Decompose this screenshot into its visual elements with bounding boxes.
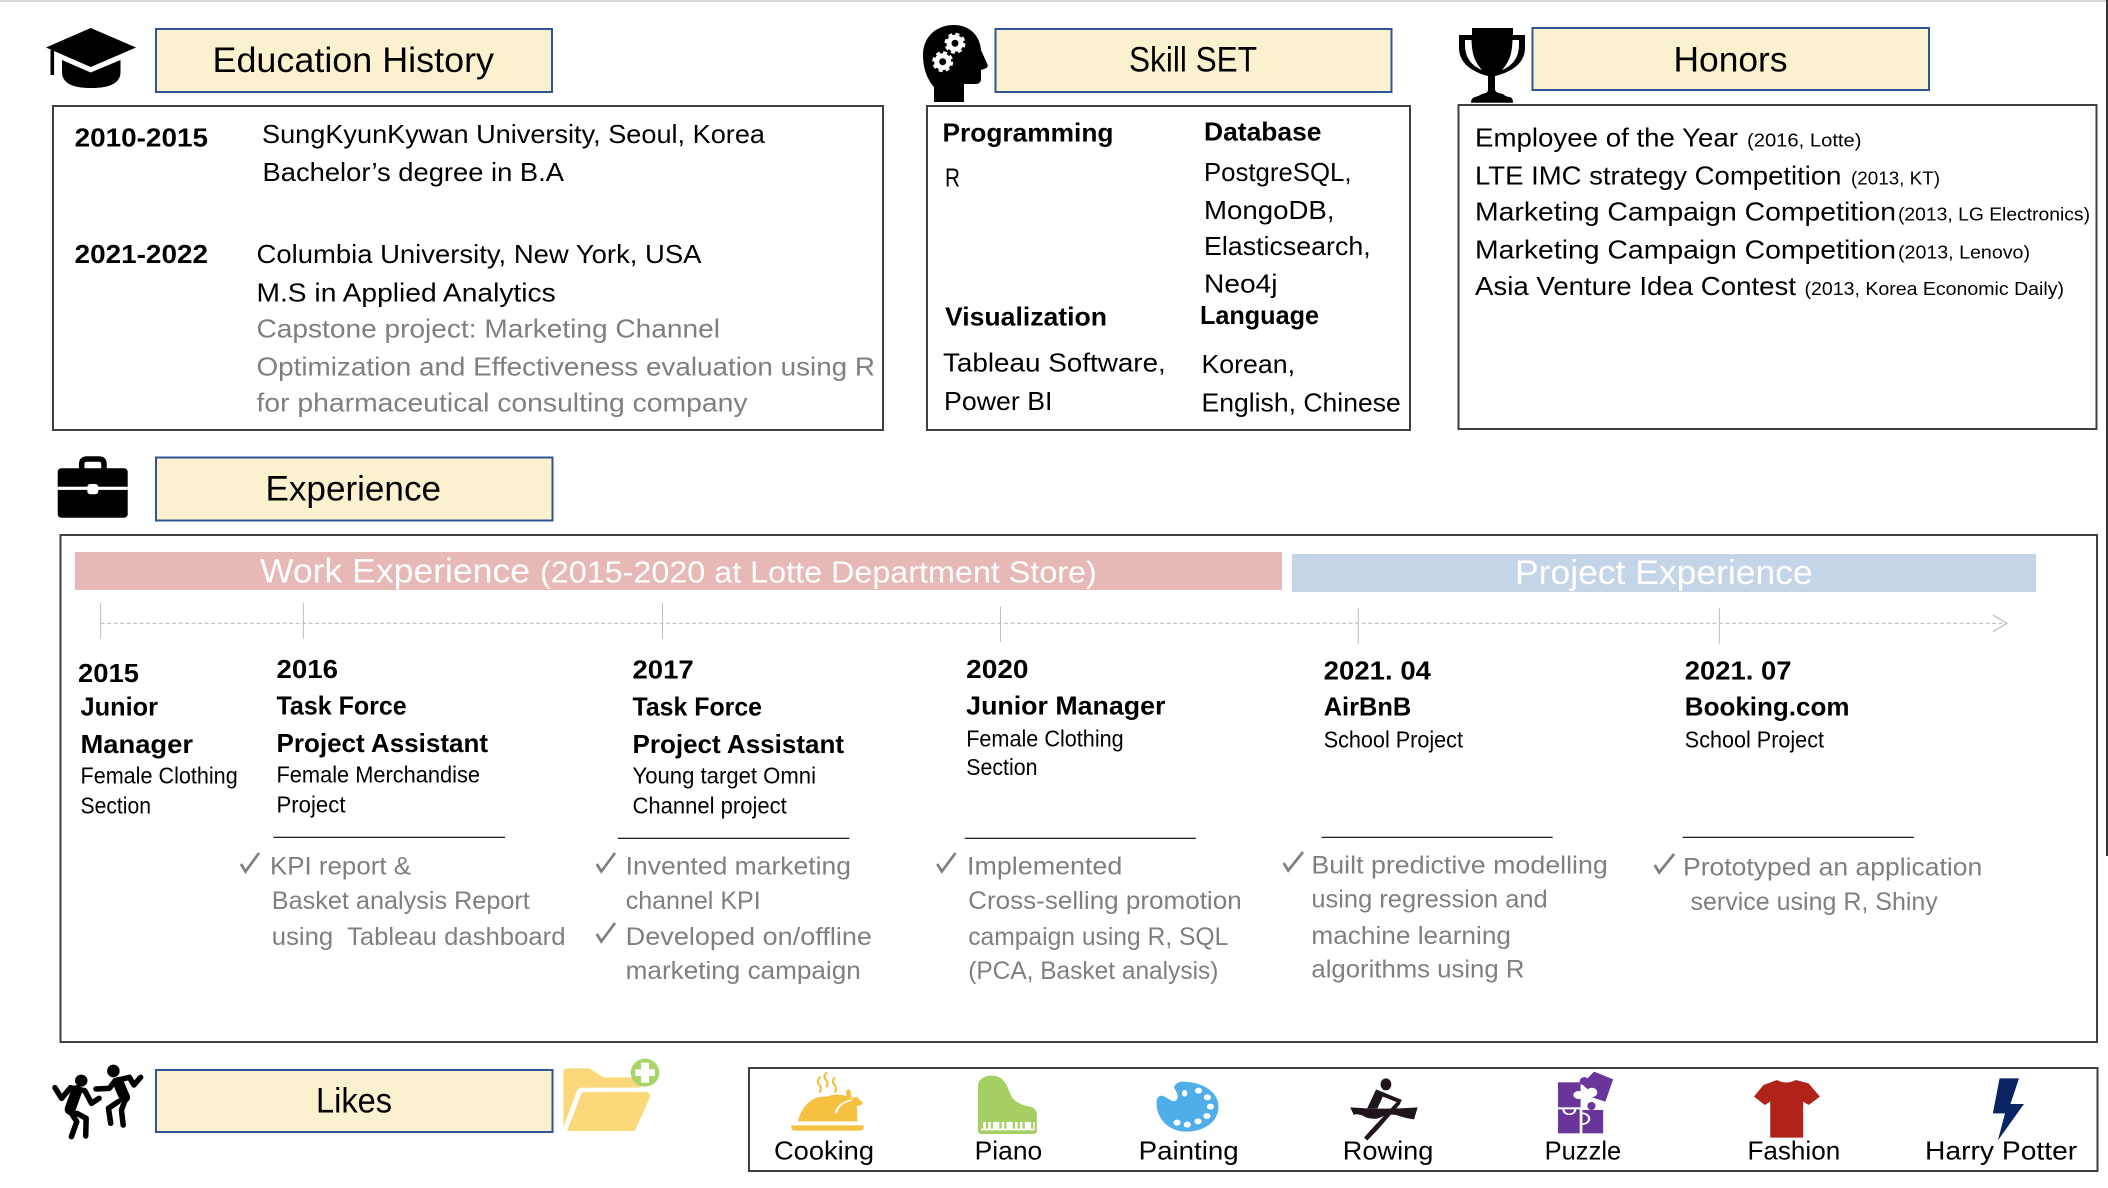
text: honor 5	[1475, 271, 2064, 301]
icon: lightning bolt	[1993, 1078, 2024, 1141]
heading: skill set	[996, 29, 1392, 92]
timeline entry: 2016: Project Assistant	[276, 728, 488, 758]
heading: experience	[156, 458, 552, 520]
heading: skill set: Skill SET	[1129, 40, 1257, 80]
timeline entry: 2015	[78, 658, 238, 818]
timeline entry: 2016	[241, 654, 566, 951]
timeline entry: 2021.04	[1284, 655, 1608, 984]
text: undergraduate degree: 2010-2015	[75, 123, 208, 153]
bullet: invented KPI: Invented marketing	[626, 852, 851, 880]
timeline entry: 2021.07: Booking.com	[1685, 692, 1850, 722]
hobby: piano: Piano	[975, 1135, 1042, 1165]
timeline axis with arrow	[101, 603, 2007, 644]
text: honor 1	[1475, 123, 1862, 153]
icon: head with gears	[923, 25, 988, 102]
icon: dancers	[55, 1065, 141, 1137]
hobby: cooking	[774, 1072, 874, 1165]
text: database: Neo4j	[1204, 269, 1278, 299]
section: likes	[55, 1059, 2097, 1171]
hobby: piano	[975, 1076, 1042, 1165]
hobby: harry potter: Harry Potter	[1925, 1135, 2078, 1165]
banner: project experience: Project Experience	[1515, 554, 1813, 592]
icon: briefcase	[58, 459, 128, 518]
bullet: invented KPI	[597, 852, 851, 915]
text: visualization: Visualization	[945, 302, 1107, 332]
bullet: cross-selling: Cross-selling promotion	[968, 887, 1242, 915]
heading: honors	[1532, 28, 1929, 90]
timeline entry: 2021.07: 2021. 07	[1685, 655, 1792, 685]
timeline entry: 2021.04: School Project	[1324, 726, 1464, 752]
text: honor 4	[1475, 235, 2030, 265]
timeline entry: 2021.04: AirBnB	[1324, 692, 1411, 722]
text: honor 4: (2013, Lenovo)	[1898, 243, 2030, 263]
banner: project experience	[1292, 554, 2036, 592]
hobby: puzzle: Puzzle	[1545, 1135, 1621, 1165]
hobby: harry potter	[1925, 1078, 2078, 1165]
text: graduate degree: 2021-2022	[75, 239, 208, 269]
heading: honors: Honors	[1674, 40, 1788, 80]
text: honor 2: (2013, KT)	[1851, 168, 1940, 188]
bullet: prototyped application: Prototyped an application	[1683, 854, 1982, 882]
text: database: Elasticsearch,	[1204, 231, 1371, 261]
hobby: cooking: Cooking	[774, 1135, 874, 1165]
text: graduate degree: for pharmaceutical consulting company	[256, 388, 748, 418]
section: honors	[1458, 28, 2096, 429]
text: database: PostgreSQL,	[1204, 157, 1352, 187]
section: experience	[58, 458, 2097, 1042]
timeline entry: 2017: 2017	[632, 654, 694, 684]
timeline entry: 2020: Section	[966, 754, 1038, 780]
timeline entry: 2017: Task Force	[632, 692, 762, 722]
timeline entry: 2015: Section	[80, 792, 151, 818]
hobby: rowing: Rowing	[1343, 1135, 1433, 1165]
text: database	[1204, 117, 1371, 299]
text: database: Database	[1204, 117, 1322, 147]
text: programming: R	[945, 163, 960, 193]
text: graduate degree: Capstone project: Marketing Channel	[256, 314, 720, 344]
panel: education entries	[53, 106, 883, 430]
timeline entry: 2015: Junior	[80, 692, 158, 722]
bullet: invented KPI: channel KPI	[626, 887, 761, 915]
text: graduate degree: Columbia University, New York, USA	[256, 239, 702, 269]
text: undergraduate degree: Bachelor’s degree in B.A	[262, 157, 565, 187]
text: visualization: Power BI	[944, 386, 1052, 416]
text: honor 1: (2016, Lotte)	[1747, 131, 1862, 151]
timeline entry: 2021.07: School Project	[1685, 726, 1825, 752]
text: visualization: Tableau Software,	[943, 348, 1166, 378]
text: language	[1200, 300, 1401, 418]
panel: skills	[927, 106, 1410, 430]
bullet: KPI report: KPI report &	[270, 852, 411, 880]
bullet: KPI report: using Tableau dashboard	[272, 923, 566, 951]
panel: experience timeline	[60, 535, 2097, 1042]
timeline entry: 2017	[597, 654, 872, 985]
text: graduate degree: Optimization and Effectiveness evaluation using R	[256, 352, 875, 382]
section: education history	[46, 28, 883, 430]
bullet: cross-selling: campaign using R, SQL	[968, 923, 1228, 951]
timeline entry: 2016: Female Merchandise	[276, 761, 480, 787]
text: programming	[942, 118, 1114, 193]
timeline entry: 2016: Project	[276, 791, 346, 817]
icon: roast chicken	[791, 1072, 864, 1131]
section: skill set	[923, 25, 1410, 430]
bullet: cross-selling: Implemented	[967, 852, 1122, 880]
hobby: fashion: Fashion	[1748, 1135, 1840, 1165]
timeline entry: 2016: Task Force	[276, 690, 407, 720]
text: honor 3: Marketing Campaign Competition	[1475, 197, 1896, 227]
text: honor 5: (2013, Korea Economic Daily)	[1804, 279, 2064, 299]
hobby: puzzle	[1545, 1072, 1621, 1165]
bullet: predictive modelling: machine learning	[1311, 922, 1511, 950]
timeline entry: 2017: Project Assistant	[632, 729, 844, 759]
hobby: fashion	[1748, 1080, 1840, 1165]
text: undergraduate degree	[75, 119, 766, 187]
panel: honors list	[1458, 105, 2096, 429]
bullet: cross-selling	[937, 852, 1242, 985]
icon: grand piano	[978, 1076, 1037, 1134]
timeline entry: 2021.07	[1655, 655, 1982, 916]
timeline entry: 2020: Junior Manager	[966, 690, 1165, 720]
text: graduate degree: M.S in Applied Analytics	[256, 278, 556, 308]
text: graduate degree	[75, 239, 875, 418]
timeline entry: 2020: Female Clothing	[966, 726, 1124, 752]
icon: paint palette	[1156, 1082, 1219, 1132]
text: honor 1: Employee of the Year	[1475, 123, 1738, 153]
timeline entry: 2020	[937, 654, 1242, 985]
icon: graduation cap	[46, 28, 136, 88]
text: language: Korean,	[1202, 349, 1295, 379]
heading: experience: Experience	[266, 470, 441, 508]
panel: hobbies	[749, 1068, 2098, 1171]
text: honor 3: (2013, LG Electronics)	[1898, 205, 2090, 225]
banner: work experience: Work Experience	[260, 553, 530, 591]
bullet: prototyped application: service using R, Shiny	[1690, 888, 1938, 916]
timeline entry: 2015: 2015	[78, 658, 139, 688]
heading: likes: Likes	[316, 1082, 392, 1120]
text: honor 5: Asia Venture Idea Contest	[1475, 271, 1797, 301]
bullet: prototyped application	[1655, 854, 1982, 916]
text: honor 2: LTE IMC strategy Competition	[1475, 160, 1842, 190]
timeline entry: 2015: Manager	[80, 729, 193, 759]
icon: t-shirt	[1754, 1080, 1820, 1138]
heading: likes	[156, 1070, 552, 1132]
text: honor 3	[1475, 197, 2090, 227]
icon: puzzle pieces	[1558, 1072, 1613, 1133]
bullet: predictive modelling: using regression and	[1311, 886, 1548, 914]
bullet: predictive modelling: algorithms using R	[1311, 956, 1524, 984]
text: undergraduate degree: SungKyunKywan University, Seoul, Korea	[262, 119, 766, 149]
timeline entry: 2020: 2020	[966, 654, 1028, 684]
banner: work experience	[75, 552, 1282, 591]
timeline entry: 2017: Young target Omni	[632, 762, 816, 788]
timeline entry: 2016: 2016	[276, 654, 338, 684]
bullet: KPI report: Basket analysis Report	[272, 887, 530, 915]
heading: education history: Education History	[212, 41, 495, 80]
icon: rower in boat	[1350, 1078, 1418, 1141]
heading: education history	[156, 29, 552, 92]
text: visualization	[943, 302, 1166, 416]
timeline entry: 2021.04: 2021. 04	[1324, 655, 1432, 685]
hobby: painting: Painting	[1139, 1135, 1239, 1165]
hobby: painting	[1139, 1082, 1239, 1165]
timeline entry: 2017: Channel project	[632, 792, 787, 818]
text: programming: Programming	[942, 118, 1114, 148]
timeline entry: 2015: Female Clothing	[80, 762, 238, 788]
bullet: predictive modelling: Built predictive modelling	[1311, 851, 1608, 879]
bullet: predictive modelling	[1284, 851, 1608, 984]
icon: folder with plus	[563, 1059, 659, 1131]
text: language: English, Chinese	[1202, 388, 1401, 418]
icon: trophy	[1459, 28, 1525, 103]
bullet: developed campaign	[597, 923, 872, 985]
text: honor 4: Marketing Campaign Competition	[1475, 235, 1896, 265]
hobby: rowing	[1343, 1078, 1433, 1165]
text: database: MongoDB,	[1204, 195, 1334, 225]
bullet: KPI report	[241, 852, 566, 951]
bullet: cross-selling: (PCA, Basket analysis)	[968, 957, 1218, 985]
bullet: developed campaign: marketing campaign	[626, 957, 861, 985]
banner: work experience: (2015-2020 at Lotte Department Store)	[540, 555, 1097, 590]
bullet: developed campaign: Developed on/offline	[626, 923, 872, 951]
text: language: Language	[1200, 300, 1319, 330]
